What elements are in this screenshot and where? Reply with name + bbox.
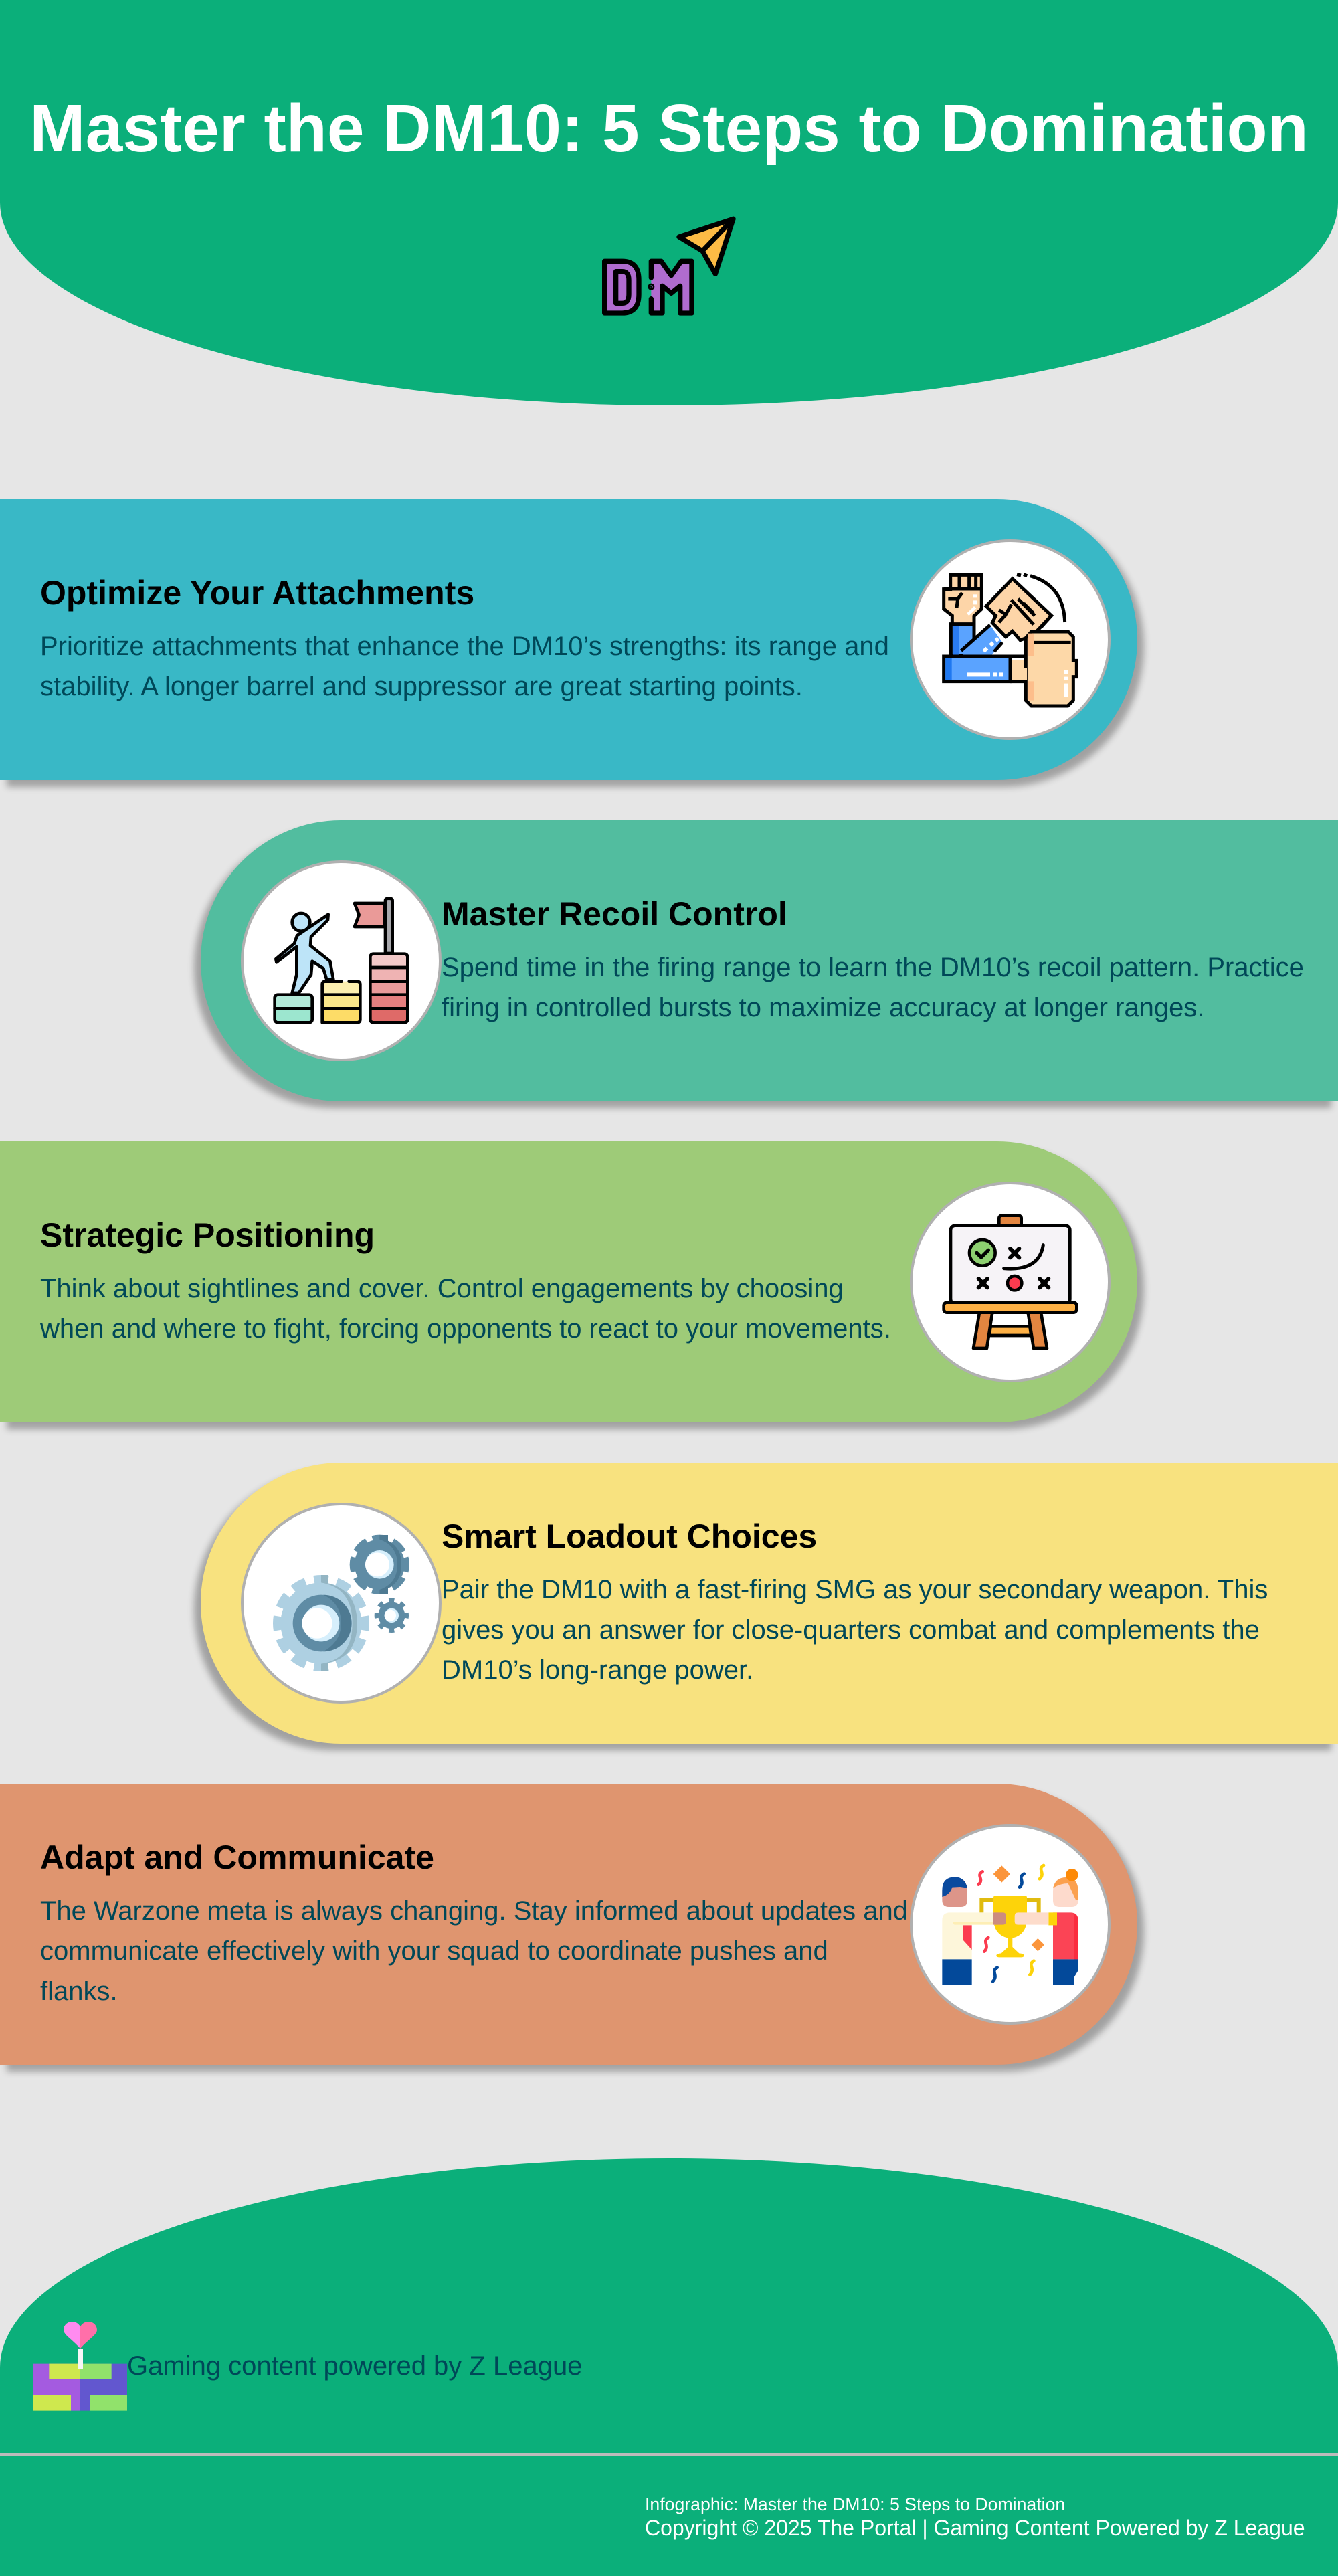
text block: step 3: Strategic Positioning xyxy=(40,1216,375,1254)
text block: step 3 xyxy=(40,1216,891,1344)
footer info text: Infographic: Master the DM10: 5 Steps to Domination xyxy=(645,2494,1065,2514)
footer info text: Copyright © 2025 The Portal | Gaming Content Powered by Z League xyxy=(645,2516,1305,2540)
text block: step 5 xyxy=(40,1839,908,2006)
icon: raised fists xyxy=(910,539,1111,740)
text block: step 2: firing in controlled bursts to maximize accuracy at longer ranges. xyxy=(442,993,1205,1022)
text block: step 1: Prioritize attachments that enhance the DM10’s strengths: its range and xyxy=(40,632,889,661)
panel: optimize your attachments xyxy=(0,499,1137,780)
text block: step 4: gives you an answer for close-quarters combat and complements the xyxy=(442,1615,1260,1645)
text block: step 2 xyxy=(442,895,1304,1022)
text block: step 3: Think about sightlines and cover. Control engagements by choosing xyxy=(40,1274,844,1303)
panel: strategic positioning xyxy=(0,1141,1137,1422)
panel: smart loadout choices xyxy=(201,1463,1338,1744)
header band xyxy=(0,0,1338,405)
text block: step 5: communicate effectively with your squad to coordinate pushes and xyxy=(40,1936,828,1966)
icon: gears xyxy=(241,1503,442,1704)
sponsor text: Gaming content powered by Z League xyxy=(127,2351,582,2381)
text block: step 4: Pair the DM10 with a fast-firing SMG as your secondary weapon. This xyxy=(442,1575,1268,1604)
footer band xyxy=(0,2158,1338,2576)
text block: step 3: when and where to fight, forcing opponents to react to your movements. xyxy=(40,1314,891,1344)
panel: adapt and communicate xyxy=(0,1784,1137,2065)
text block: step 4: Smart Loadout Choices xyxy=(442,1517,817,1555)
text block: step 1: stability. A longer barrel and suppressor are great starting points. xyxy=(40,672,803,701)
text block: step 2: Master Recoil Control xyxy=(442,895,787,933)
text block: step 5: Adapt and Communicate xyxy=(40,1839,434,1876)
text block: step 1 xyxy=(40,574,889,701)
text block: step 4: DM10’s long-range power. xyxy=(442,1655,753,1685)
title: Master the DM10: 5 Steps to Domination xyxy=(29,91,1309,166)
icon: DM logo with paper plane xyxy=(602,217,736,316)
icon: tactics board on easel xyxy=(910,1182,1111,1382)
footer info text xyxy=(645,2494,1305,2540)
text block: step 1: Optimize Your Attachments xyxy=(40,574,474,612)
icon: climbing steps to flag xyxy=(241,860,442,1061)
text block: step 5: The Warzone meta is always changing. Stay informed about updates and xyxy=(40,1896,908,1926)
panel: master recoil control xyxy=(201,820,1338,1101)
icon: team with trophy xyxy=(910,1824,1111,2025)
text block: step 2: Spend time in the firing range to learn the DM10’s recoil pattern. Practice xyxy=(442,953,1304,982)
text block: step 5: flanks. xyxy=(40,1976,118,2006)
icon: heart game block logo xyxy=(33,2322,127,2411)
text block: step 4 xyxy=(442,1517,1268,1685)
